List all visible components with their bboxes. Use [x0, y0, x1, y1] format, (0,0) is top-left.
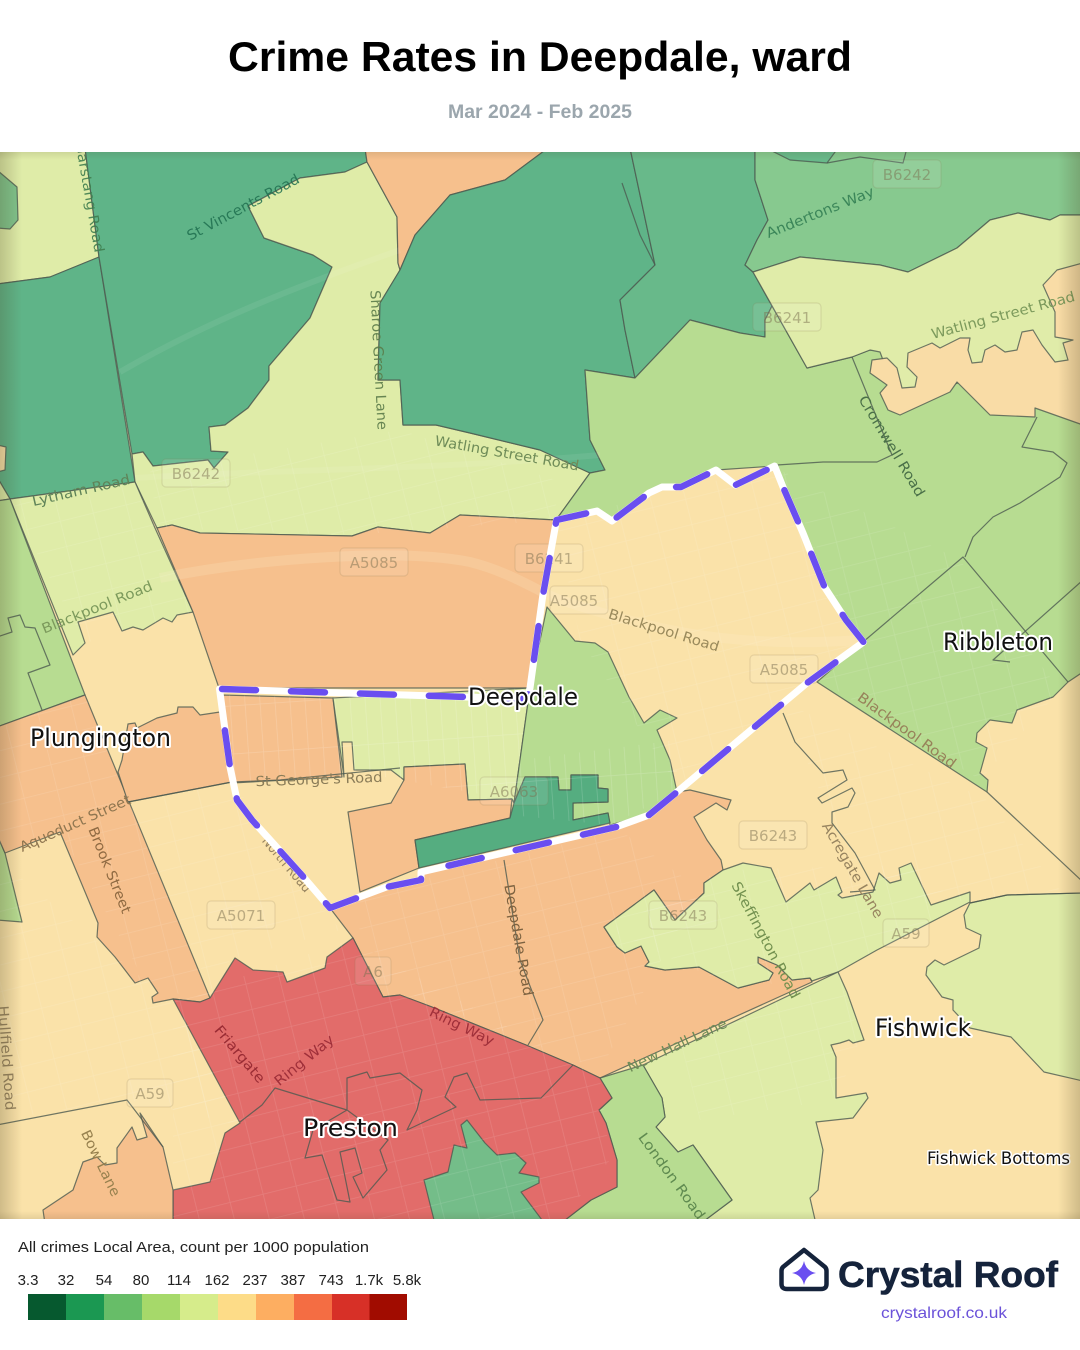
region: top right mid green — [745, 148, 1080, 272]
road number shields: A5085 — [760, 661, 808, 679]
road name labels: Blackpool Road — [40, 578, 155, 637]
road number shields: A5071 — [217, 907, 265, 925]
road number shields: B6241 — [525, 550, 573, 568]
road name labels: Garstang Road — [71, 141, 107, 254]
road name labels: London Road — [634, 1130, 708, 1223]
region: top left light green — [0, 148, 99, 284]
road name labels: St George's Road — [255, 770, 383, 790]
road name labels: Watling Street Road — [434, 433, 580, 475]
region: Fishwick east light green — [926, 893, 1080, 1081]
region: pale notch on west edge — [0, 445, 6, 472]
Deepdale ward boundary dashed outline — [220, 466, 864, 908]
legend scale values: 3.3 — [18, 1272, 38, 1289]
region: St Vincents dark green — [85, 148, 367, 468]
road number shields: A5085 — [550, 592, 598, 610]
region: London Road mid green — [560, 1065, 732, 1224]
legend colour bar — [28, 1294, 407, 1320]
road number shields: B6241 — [763, 309, 811, 327]
road name labels: New Hall Lane — [625, 1016, 730, 1076]
road number shields: A6 — [363, 963, 383, 981]
place: Fishwick: Fishwick — [875, 1014, 971, 1042]
road name labels: Aqueduct Street — [17, 792, 134, 856]
region: central north dark green — [378, 148, 655, 473]
icon: house with star — [782, 1250, 826, 1289]
legend scale values: 80 — [133, 1272, 149, 1289]
region: Plungington east orange — [118, 707, 232, 802]
road name labels: Brook Street — [84, 825, 134, 917]
road name labels: North Road — [258, 833, 314, 896]
region: north Deepdale orange park — [157, 515, 556, 688]
region: far west mid green — [0, 499, 85, 727]
region: Watling light green — [753, 213, 1080, 392]
region: south west orange — [43, 1113, 173, 1224]
legend scale values: 54 — [96, 1272, 112, 1289]
logo wordmark: Crystal Roof — [838, 1254, 1059, 1295]
region: top orange — [365, 148, 548, 270]
choropleth regions — [0, 148, 1080, 1224]
street texture — [0, 250, 1060, 1220]
region: Preston city centre red — [173, 938, 617, 1224]
region: south orange — [330, 790, 812, 1078]
road number shields: A59 — [891, 925, 921, 943]
road name labels: Lytham Road — [31, 472, 132, 510]
title: Crime Rates in Deepdale, ward — [228, 33, 852, 80]
map place names — [30, 628, 1070, 1169]
region: inner mid green — [514, 607, 677, 825]
region: inner dark green block — [415, 775, 610, 868]
legend scale values — [18, 1272, 422, 1289]
road number shields: A6063 — [490, 783, 538, 801]
road number shields: B6243 — [659, 907, 707, 925]
legend scale values: 5.8k — [393, 1272, 422, 1289]
region: Plungington orange — [0, 695, 210, 1003]
legend scale values: 387 — [280, 1272, 306, 1289]
region: green inside city centre — [424, 1120, 545, 1224]
legend scale values: 1.7k — [355, 1272, 384, 1289]
road number shields: B6242 — [883, 166, 931, 184]
place: Fishwick Bottoms: Fishwick Bottoms — [927, 1149, 1070, 1169]
road name labels: Ring Way — [272, 1032, 338, 1090]
legend scale values: 743 — [318, 1272, 344, 1289]
extra boundary lines — [0, 148, 1080, 1202]
legend — [18, 1239, 422, 1320]
road name labels: Deepdale Road — [500, 883, 536, 997]
legend title: All crimes Local Area, count per 1000 population — [18, 1239, 369, 1256]
road name labels: Acregate Lane — [818, 820, 886, 921]
road name labels — [0, 141, 1077, 1223]
region: Skeffington light green — [604, 863, 970, 988]
website url: crystalroof.co.uk — [881, 1305, 1008, 1322]
logo: Crystal Roof — [782, 1250, 1059, 1322]
region: north east pale — [870, 263, 1080, 425]
place: Ribbleton: Ribbleton — [943, 628, 1053, 656]
road name labels: Cromwell Road — [855, 393, 928, 500]
region: tiny light green on west edge — [0, 481, 10, 500]
region: inner west orange — [222, 695, 342, 783]
legend scale values: 162 — [204, 1272, 230, 1289]
place: Deepdale: Deepdale — [468, 683, 578, 711]
road name labels: Blackpool Road — [606, 606, 721, 655]
place: Plungington: Plungington — [30, 724, 171, 752]
place: Preston: Preston — [303, 1114, 398, 1142]
road name labels: Blackpool Road — [854, 690, 959, 772]
road name labels: St Vincents Road — [185, 171, 302, 244]
region: west light green — [10, 482, 193, 655]
road number shields — [127, 160, 941, 1107]
region: north east dark green — [620, 148, 772, 378]
road name labels: Ring Way — [427, 1004, 497, 1049]
legend scale values: 237 — [242, 1272, 268, 1289]
legend scale values: 114 — [167, 1272, 191, 1289]
road number shields: B6243 — [749, 827, 797, 845]
region: east large mid green — [556, 306, 1080, 792]
region: south light green — [643, 972, 868, 1224]
region: north west dark green — [0, 257, 135, 499]
road name labels: Sharoe Green Lane — [366, 290, 390, 430]
road name labels: Andertons Way — [764, 184, 877, 242]
road number shields: A5085 — [350, 554, 398, 572]
region: Sharoe Green light green — [132, 162, 590, 536]
region: inner orange block — [348, 764, 512, 892]
region: south west small green — [0, 835, 22, 922]
region: inner light green — [333, 688, 530, 803]
road name labels: Friargate — [211, 1023, 268, 1087]
road number shields: A59 — [135, 1085, 165, 1103]
road number shields: B6242 — [172, 465, 220, 483]
legend scale values: 32 — [58, 1272, 74, 1289]
road name labels: Skeffington Road — [728, 879, 803, 1002]
subtitle: date range: Mar 2024 - Feb 2025 — [448, 102, 632, 123]
road name labels: Watling Street Road — [930, 289, 1077, 343]
road name labels: Bow Lane — [77, 1128, 123, 1199]
